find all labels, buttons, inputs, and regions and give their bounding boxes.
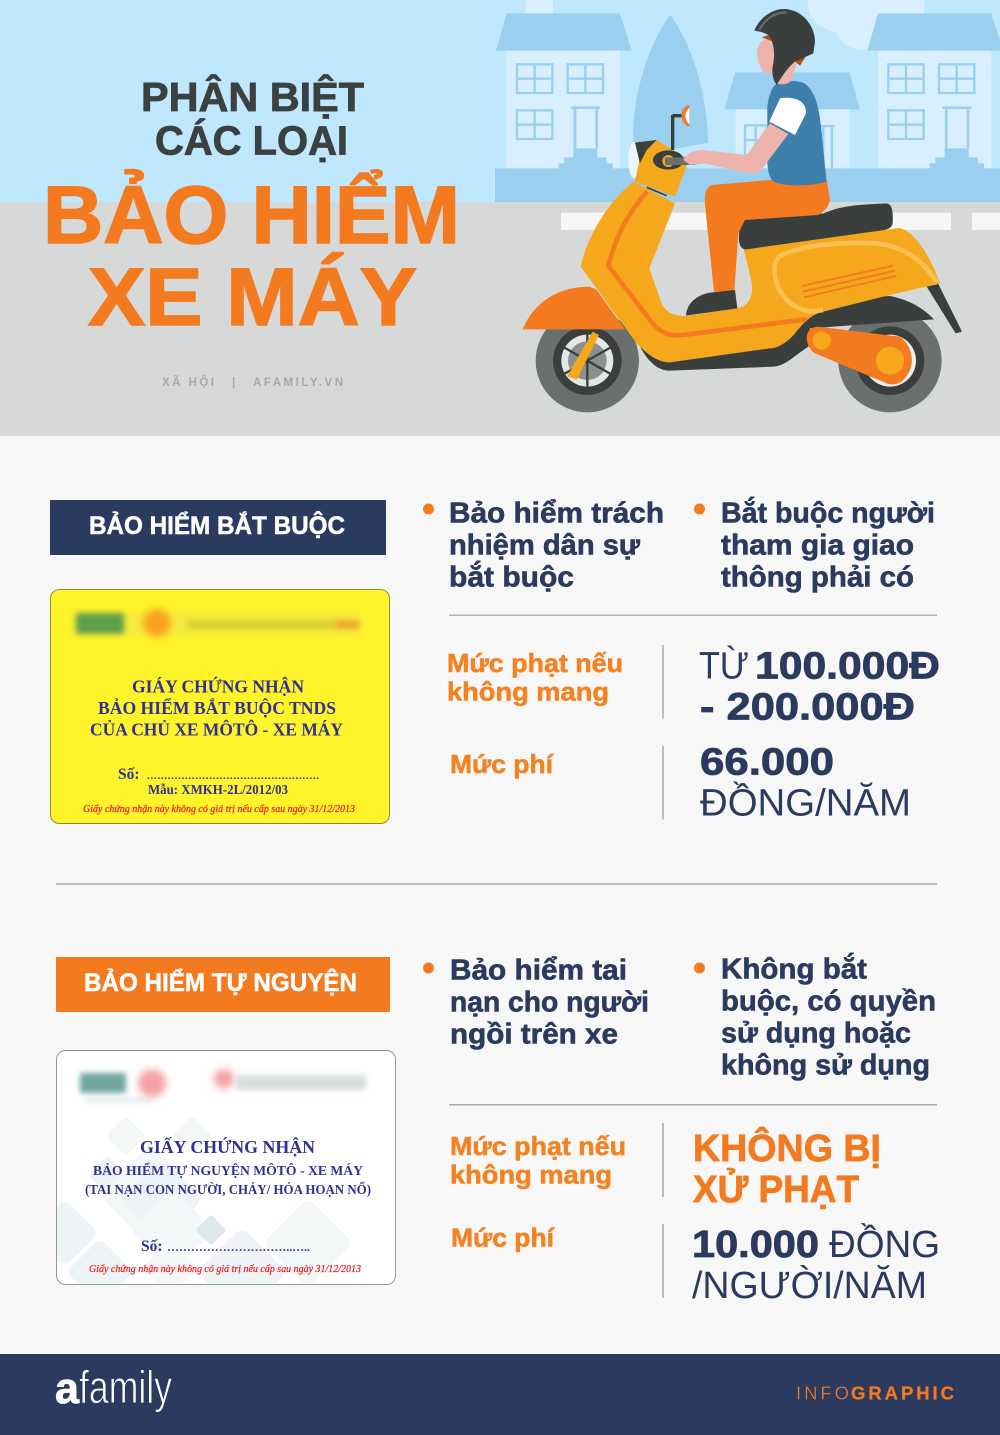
certificate: white [56, 1050, 396, 1285]
bullet: mandatory for road users: Bắt buộc người [721, 496, 935, 530]
bullet: passenger accident: ngồi trên xe [450, 1018, 618, 1050]
heading: compulsory [50, 500, 386, 555]
illustration: houses and street [495, 0, 1000, 230]
source line: | [232, 377, 235, 389]
illustration: rider on scooter [523, 9, 962, 412]
label: penalty: không mang [447, 676, 609, 706]
source line [162, 376, 343, 389]
rear fender and underbody [638, 296, 934, 371]
label: fee: Mức phí [450, 749, 554, 779]
value: fee amount [692, 1222, 940, 1307]
bullet: mandatory for road users: thông phải có [721, 562, 914, 594]
panel: compulsory insurance [50, 496, 940, 824]
value: penalty amount [699, 644, 940, 728]
certificate: yellow: CỦA CHỦ XE MÔTÔ - XE MÁY [90, 718, 343, 740]
label: infographic: GRAPHIC [851, 1382, 954, 1404]
bullet: passenger accident: nạn cho người [450, 986, 649, 1018]
heading: voluntary [56, 957, 390, 1012]
certificate: white: Số: [141, 1238, 163, 1255]
title: CÁC LOẠI [155, 118, 348, 164]
bullet: mandatory for road users: tham gia giao [721, 530, 914, 562]
handlebar head [635, 140, 697, 197]
value: fee amount: ĐỒNG [829, 1222, 940, 1266]
label: infographic [796, 1382, 954, 1404]
front wheel [536, 309, 639, 412]
value: no penalty: XỬ PHẠT [693, 1167, 859, 1211]
front fender [523, 287, 625, 329]
value: fee amount: ĐỒNG/NĂM [700, 780, 911, 824]
shoe [686, 290, 737, 316]
house left [496, 0, 632, 171]
panel: voluntary insurance [31, 952, 940, 1317]
scooter body [581, 182, 940, 362]
logo: afamily: a [55, 1364, 80, 1413]
source line: XÃ HỘI [162, 376, 214, 389]
bullet: civil liability: Bảo hiểm trách [449, 498, 664, 530]
bullet: civil liability: bắt buộc [449, 560, 574, 594]
bullet: optional: không sử dụng [721, 1050, 930, 1082]
certificate: yellow: Giấy chứng nhận này không có giá trị nếu cấp sau ngày 31/12/2013 [83, 803, 355, 815]
swing arm [807, 327, 912, 384]
label: penalty: Mức phạt nếu [447, 648, 623, 678]
heading: voluntary: BẢO HIỂM TỰ NGUYỆN [84, 967, 357, 997]
label: penalty: Mức phạt nếu [450, 1131, 626, 1161]
certificate: white: Giấy chứng nhận này không có giá trị nếu cấp sau ngày 31/12/2013 [89, 1263, 361, 1275]
title [43, 74, 460, 343]
bullet: passenger accident [423, 954, 649, 1050]
value: penalty amount: TỪ [699, 644, 749, 688]
hero banner [0, 0, 1000, 436]
bullet: civil liability: nhiệm dân sự [449, 530, 640, 562]
certificate: yellow: Mẫu: XMKH-2L/2012/03 [148, 782, 288, 798]
value: penalty amount: 100.000Đ [755, 646, 940, 688]
title: XE MÁY [88, 252, 417, 343]
certificate: yellow: Số: [118, 766, 140, 783]
house right [867, 0, 1000, 171]
value: fee amount: 10.000 [692, 1224, 819, 1266]
label: infographic: INFO [796, 1382, 849, 1404]
source line: AFAMILY.VN [253, 377, 343, 389]
cloud [808, 0, 924, 50]
label: penalty [450, 1131, 626, 1190]
certificate: yellow: BẢO HIỂM BẮT BUỘC TNDS [98, 697, 336, 718]
helmet [754, 9, 815, 85]
logo: afamily: family [79, 1361, 172, 1413]
certificate: white: (TAI NẠN CON NGƯỜI, CHÁY/ HỎA HOẠN NỔ) [85, 1180, 371, 1198]
mirror [673, 105, 689, 150]
bullet: optional [694, 952, 936, 1082]
hair [762, 33, 808, 66]
certificate: yellow: GIÁY CHỨNG NHẬN [132, 676, 304, 696]
rear wheel [838, 309, 942, 412]
tree [633, 15, 708, 157]
bullet: mandatory for road users [694, 496, 935, 594]
bullet: civil liability [423, 498, 664, 594]
title: PHÂN BIỆT [141, 74, 364, 120]
rider legs [705, 180, 830, 292]
logo: afamily [55, 1361, 172, 1413]
lane markings [561, 213, 951, 230]
value: fee amount: /NGƯỜI/NĂM [692, 1264, 927, 1307]
label: fee: Mức phí [451, 1222, 555, 1252]
value: no penalty: KHÔNG BỊ [693, 1125, 881, 1170]
seat [739, 203, 893, 249]
certificate: white: …………………………..….. [167, 1240, 310, 1254]
certificate: yellow [50, 590, 390, 824]
certificate: white: BẢO HIỂM TỰ NGUYỆN MÔTÔ - XE MÁY [93, 1161, 363, 1179]
value: no penalty [693, 1125, 881, 1211]
value: fee amount [700, 742, 911, 824]
label: penalty: không mang [450, 1160, 612, 1190]
title: BẢO HIỂM [43, 170, 460, 261]
value: penalty amount: - 200.000Đ [700, 686, 915, 728]
sleeve [769, 98, 806, 135]
bullet: optional: buộc, có quyền [721, 986, 936, 1018]
vest [767, 81, 827, 185]
certificate: yellow: .................................................. [147, 770, 319, 782]
neck and face [777, 60, 797, 84]
value: fee amount: 66.000 [700, 742, 834, 784]
house middle [724, 72, 860, 169]
bullet: optional: sử dụng hoặc [721, 1018, 911, 1050]
bullet: optional: Không bắt [721, 952, 867, 986]
label: penalty [447, 648, 623, 706]
footer [0, 1354, 1000, 1435]
heading: compulsory: BẢO HIỂM BẮT BUỘC [89, 510, 345, 540]
headlight [628, 142, 640, 178]
arm [683, 123, 788, 174]
certificate: white: GIẤY CHỨNG NHẬN [140, 1136, 315, 1157]
bullet: passenger accident: Bảo hiểm tai [450, 954, 627, 986]
